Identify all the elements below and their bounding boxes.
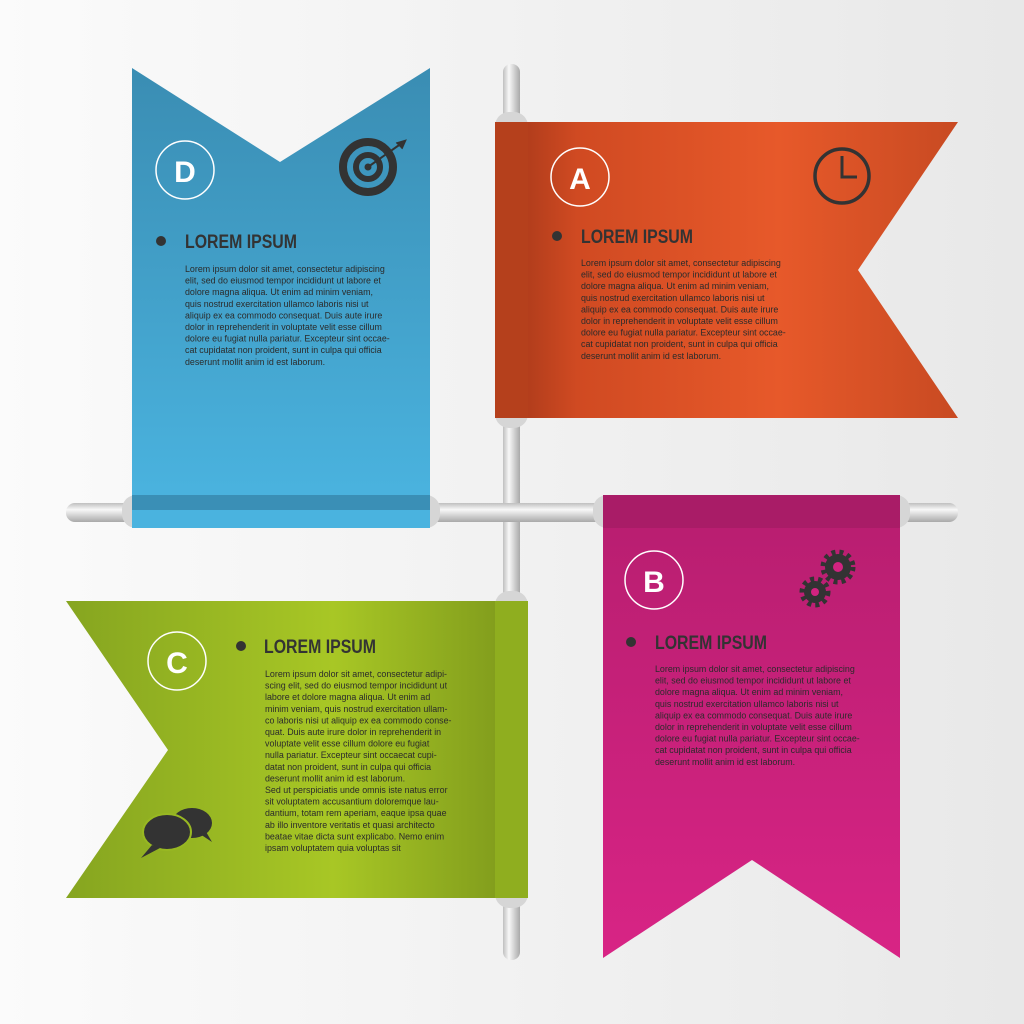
text C: quat. Duis aute irure dolor in reprehenderit in [265,727,441,737]
text C: Sed ut perspiciatis unde omnis iste natus error [265,785,448,795]
text B: dolore eu fugiat nulla pariatur. Excepteur sint occae- [655,734,860,744]
text C: dantium, totam rem aperiam, eaque ipsa quae [265,808,447,818]
text D: deserunt mollit anim id est laborum. [185,357,325,367]
heading A [552,227,693,248]
text C: sit voluptatem accusantium doloremque lau- [265,797,439,807]
text A: dolore eu fugiat nulla pariatur. Excepteur sint occae- [581,328,786,338]
text C: beatae vitae dicta sunt explicabo. Nemo enim [265,831,444,841]
icon: speech bubbles [141,808,212,858]
heading C [236,637,376,658]
text A: Lorem ipsum dolor sit amet, consectetur adipiscing [581,258,781,268]
heading A: LOREM IPSUM [581,227,693,248]
text B: elit, sed do eiusmod tempor incididunt ut labore et [655,676,851,686]
text A: elit, sed do eiusmod tempor incididunt ut labore et [581,270,777,280]
text B: dolore magna aliqua. Ut enim ad minim veniam, [655,687,843,697]
text B: dolor in reprehenderit in voluptate velit esse cillum [655,722,852,732]
panel: A orange flag [495,112,958,428]
text D: quis nostrud exercitation ullamco laboris nisi ut [185,299,369,309]
horizontal rod [66,503,958,522]
text A: cat cupidatat non proident, sunt in culpa qui officia [581,339,778,349]
badge C: C [166,647,188,680]
text A: quis nostrud exercitation ullamco laboris nisi ut [581,293,765,303]
heading B [626,633,767,654]
badge A: A [569,163,591,196]
text C: labore et dolore magna aliqua. Ut enim ad [265,692,430,702]
text B: Lorem ipsum dolor sit amet, consectetur adipiscing [655,664,855,674]
icon: target [343,140,406,192]
panel: B magenta flag [593,495,910,958]
text D: cat cupidatat non proident, sunt in culpa qui officia [185,345,382,355]
text D: dolore eu fugiat nulla pariatur. Excepteur sint occae- [185,334,390,344]
text C: co laboris nisi ut aliquip ex ea commodo conse- [265,715,452,725]
text A: aliquip ex ea commodo consequat. Duis aute irure [581,304,778,314]
text A: dolor in reprehenderit in voluptate velit esse cillum [581,316,778,326]
badge A [551,148,609,206]
text B: aliquip ex ea commodo consequat. Duis aute irure [655,710,852,720]
icon: clock [815,149,869,203]
text C: voluptate velit esse cillum dolore eu fugiat [265,739,430,749]
heading B: LOREM IPSUM [655,633,767,654]
panel: C green flag [66,591,528,908]
text C: datat non proident, sunt in culpa qui officia [265,762,431,772]
text C: ab illo inventore veritatis et quasi architecto [265,820,435,830]
text D: dolore magna aliqua. Ut enim ad minim veniam, [185,287,373,297]
icon: gears [802,552,853,605]
text A: dolore magna aliqua. Ut enim ad minim veniam, [581,281,769,291]
text B: deserunt mollit anim id est laborum. [655,757,795,767]
badge C [148,632,206,690]
text D: elit, sed do eiusmod tempor incididunt ut labore et [185,276,381,286]
text C: scing elit, sed do eiusmod tempor incididunt ut [265,681,448,691]
text C: ipsam voluptatem quia voluptas sit [265,843,401,853]
badge D: D [174,156,196,189]
text D: aliquip ex ea commodo consequat. Duis aute irure [185,310,382,320]
badge B [625,551,683,609]
badge B: B [643,566,665,599]
text D: dolor in reprehenderit in voluptate velit esse cillum [185,322,382,332]
text D: Lorem ipsum dolor sit amet, consectetur adipiscing [185,264,385,274]
text C: Lorem ipsum dolor sit amet, consectetur adipi- [265,669,447,679]
badge D [156,141,214,199]
text C: minim veniam, quis nostrud exercitation ullam- [265,704,448,714]
text B: cat cupidatat non proident, sunt in culpa qui officia [655,745,852,755]
text C: deserunt mollit anim id est laborum. [265,773,405,783]
heading D [156,232,297,253]
text B: quis nostrud exercitation ullamco laboris nisi ut [655,699,839,709]
panel: D blue flag [66,68,958,528]
text A: deserunt mollit anim id est laborum. [581,351,721,361]
vertical rod [503,64,520,960]
text C: nulla pariatur. Excepteur sint occaecat cupi- [265,750,437,760]
heading C: LOREM IPSUM [264,637,376,658]
heading D: LOREM IPSUM [185,232,297,253]
